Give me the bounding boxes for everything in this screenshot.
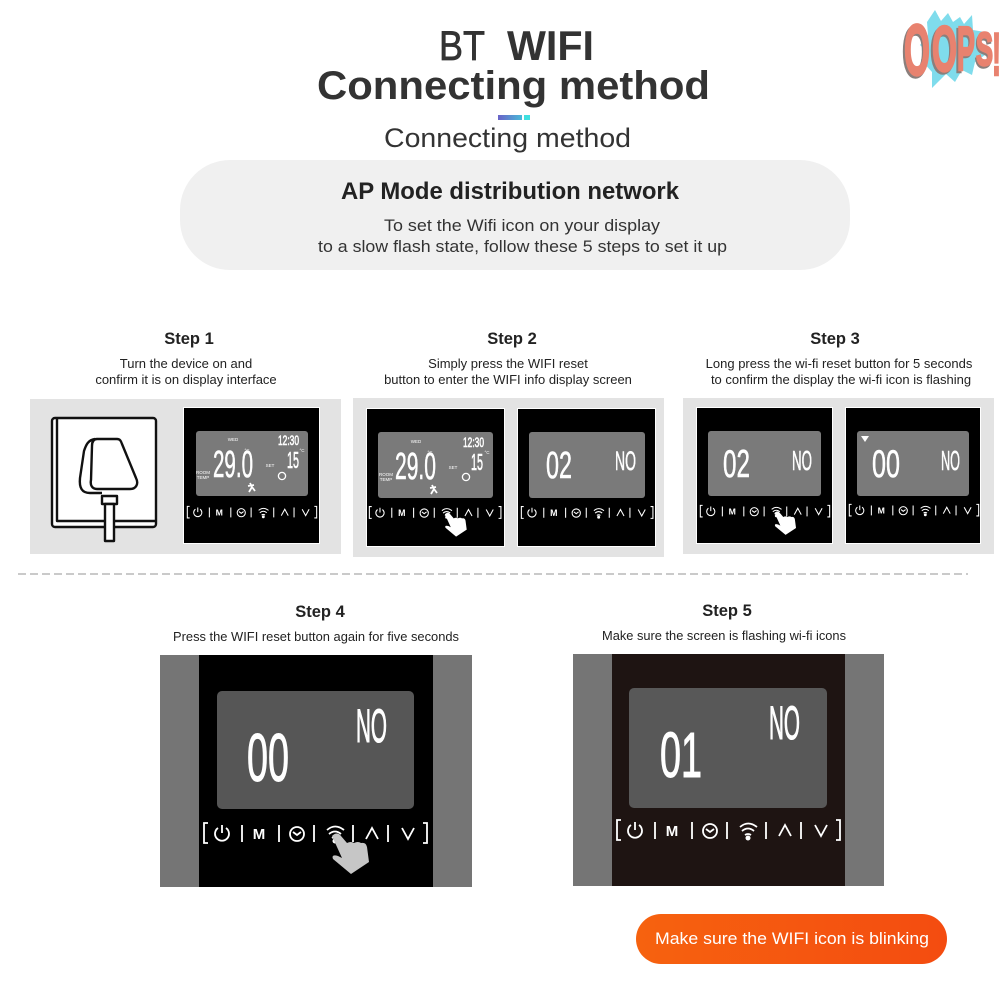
heading: step 5: Step 5 xyxy=(702,602,752,620)
heading: step 4: Step 4 xyxy=(295,603,346,621)
intro text xyxy=(318,216,727,256)
thermostat display large: 00 xyxy=(247,720,289,796)
control buttons: M xyxy=(729,507,736,517)
display readings: 29.0 xyxy=(213,444,253,486)
logo: OOPS: O xyxy=(904,11,930,91)
thermostat display with hand: 02: 02 xyxy=(723,443,750,486)
display readings: 29.0 xyxy=(395,446,436,488)
logo: OOPS: O xyxy=(902,13,929,93)
control buttons: M xyxy=(398,508,405,518)
display readings xyxy=(196,432,305,492)
thermostat display: 00 with wifi xyxy=(845,407,981,544)
thermostat display large xyxy=(573,654,884,886)
control buttons: M xyxy=(253,826,265,843)
heading: AP mode: AP Mode distribution network xyxy=(341,178,680,205)
text: step 2 description: button to enter the WIFI info display screen xyxy=(384,372,632,387)
display readings: TEMP xyxy=(380,477,392,482)
text: step 2 description: Simply press the WIFI reset xyxy=(428,356,588,371)
thermostat display: 00 with wifi: 00 xyxy=(872,443,900,486)
text: step 3 description: Long press the wi-fi reset button for 5 seconds xyxy=(706,356,973,371)
text: step 4 description: Press the WIFI reset button again for five seconds xyxy=(173,630,459,644)
display readings: °C xyxy=(427,450,433,455)
icon: pointing hand xyxy=(445,513,467,537)
logo: OOPS: O xyxy=(930,15,956,87)
control buttons: M xyxy=(666,823,678,840)
intro text: to a slow flash state, follow these 5 steps to set it up xyxy=(318,237,727,256)
accent bar xyxy=(498,115,530,120)
icon: pointing hand xyxy=(775,511,796,535)
display readings: °C xyxy=(299,448,305,453)
panel: step 4 xyxy=(160,603,472,887)
title: Connecting method xyxy=(317,64,710,108)
heading: step 2: Step 2 xyxy=(487,330,537,348)
display readings: 12:30 xyxy=(463,434,484,450)
display readings: 12:30 xyxy=(278,432,299,448)
control buttons xyxy=(204,823,427,844)
thermostat display large: NO xyxy=(769,696,800,749)
control buttons: M xyxy=(878,506,885,516)
logo: OOPS: P xyxy=(955,17,974,86)
title: WIFI xyxy=(507,22,594,69)
logo: OOPS: P xyxy=(957,15,975,84)
display readings: WED xyxy=(228,437,239,442)
heading: step 1: Step 1 xyxy=(164,330,214,348)
display readings: 15 xyxy=(471,449,483,475)
text: step 1 description: Turn the device on and xyxy=(120,356,252,371)
display readings: ROOM xyxy=(379,472,393,477)
thermostat display with hand: 02 xyxy=(696,407,833,544)
thermostat display large: 01 xyxy=(660,719,702,791)
text: step 2 description xyxy=(384,356,632,387)
text: step 1 description xyxy=(95,356,277,387)
panel: step 2 xyxy=(353,330,664,557)
control buttons xyxy=(617,820,840,840)
display readings: TEMP xyxy=(197,475,209,480)
logo: OOPS xyxy=(902,10,1000,93)
text: step 3 description xyxy=(706,356,973,387)
thermostat display large: NO xyxy=(356,699,387,752)
logo: OOPS: O xyxy=(932,13,957,85)
control buttons: M xyxy=(216,508,223,518)
display readings: SET xyxy=(266,463,275,468)
thermostat display with hand xyxy=(366,408,505,547)
panel: step 5 xyxy=(573,602,884,886)
title: BT xyxy=(439,22,485,69)
display readings: WED xyxy=(411,439,422,444)
subtitle: Connecting method xyxy=(384,123,631,153)
panel: step 1 xyxy=(30,330,341,554)
thermostat display: 02: 02 xyxy=(546,445,572,487)
display readings: 15 xyxy=(287,447,299,473)
callout: blinking reminder: Make sure the WIFI icon is blinking xyxy=(655,929,929,948)
display readings xyxy=(379,434,490,494)
panel: AP mode intro xyxy=(180,160,850,270)
icon: pointing hand xyxy=(332,834,369,874)
thermostat display large xyxy=(160,655,472,887)
thermostat display with hand: 02: NO xyxy=(792,445,812,476)
display readings: °C xyxy=(244,448,250,453)
thermostat display: 02 xyxy=(517,408,656,547)
display readings: ROOM xyxy=(196,470,210,475)
panel: step 3 xyxy=(683,330,994,554)
intro text: To set the Wifi icon on your display xyxy=(384,216,661,235)
heading: step 3: Step 3 xyxy=(810,330,860,348)
text: step 5 description: Make sure the screen is flashing wi-fi icons xyxy=(602,629,846,643)
display readings: °C xyxy=(484,450,490,455)
control buttons: M xyxy=(550,508,557,518)
thermostat display xyxy=(183,407,320,544)
title xyxy=(317,22,710,108)
text: step 1 description: confirm it is on display interface xyxy=(95,372,277,387)
display readings: SET xyxy=(449,465,458,470)
thermostat display: 02: NO xyxy=(615,446,636,476)
callout: blinking reminder xyxy=(636,914,947,964)
thermostat display: 00 with wifi: NO xyxy=(941,445,960,476)
icon: wall plug xyxy=(52,418,156,541)
text: step 3 description: to confirm the display the wi-fi icon is flashing xyxy=(711,372,971,387)
